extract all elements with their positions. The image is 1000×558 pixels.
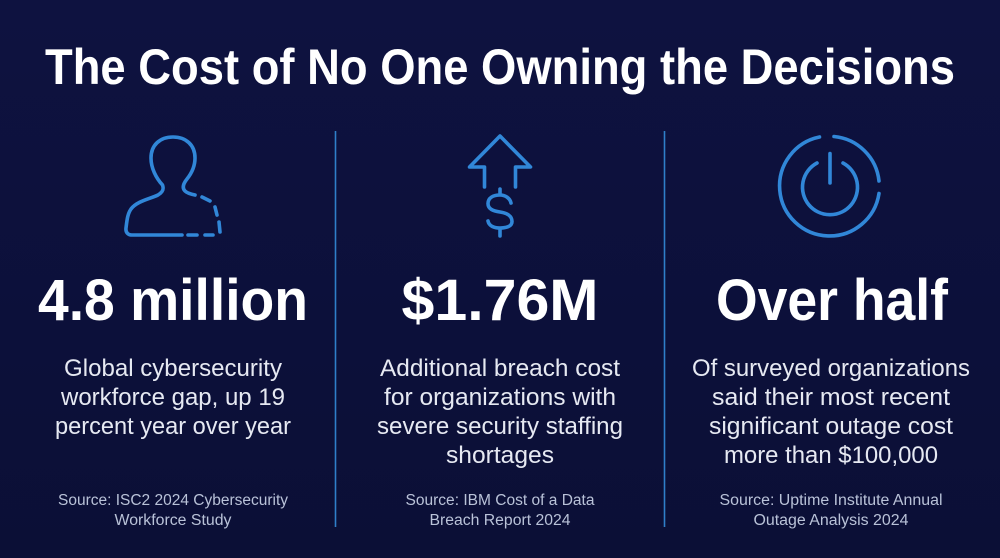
source: IBM: Source: IBM Cost of a Data	[406, 492, 595, 509]
source: ISC2	[58, 492, 288, 529]
stat: 4.8 million: 4.8 million	[38, 268, 308, 333]
source: IBM: Breach Report 2024	[430, 512, 571, 529]
text block: workforce description	[55, 355, 291, 440]
text block: breach description: severe security staffing	[377, 413, 623, 440]
text block: workforce description: workforce gap, up 19	[60, 384, 285, 411]
icon: up arrow with dollar sign	[470, 136, 530, 236]
text block: breach description: shortages	[446, 442, 554, 469]
text block: workforce description: percent year over year	[55, 413, 291, 440]
icon: person with dashed shoulder	[126, 137, 220, 235]
source: ISC2: Workforce Study	[114, 512, 232, 529]
text block: outage description: significant outage cost	[709, 413, 953, 440]
text block: outage description: more than $100,000	[724, 442, 938, 469]
source: Uptime: Outage Analysis 2024	[754, 512, 909, 529]
text block: breach description: for organizations with	[384, 384, 616, 411]
stat: $1.76M: $1.76M	[402, 268, 598, 333]
text block: breach description: Additional breach cost	[380, 355, 620, 382]
text block: outage description	[692, 355, 970, 469]
text block: breach description	[377, 355, 623, 469]
text block: outage description: said their most recent	[712, 384, 950, 411]
text block: outage description: Of surveyed organizations	[692, 355, 970, 382]
text block: workforce description: Global cybersecurity	[64, 355, 282, 382]
panel: workforce gap	[38, 137, 308, 529]
source: Uptime	[720, 492, 942, 529]
source: IBM	[406, 492, 595, 529]
panel: breach cost	[377, 136, 623, 529]
panel: outage cost	[692, 136, 970, 529]
source: Uptime: Source: Uptime Institute Annual	[720, 492, 942, 509]
source: ISC2: Source: ISC2 2024 Cybersecurity	[58, 492, 288, 509]
icon: power button	[780, 136, 879, 236]
stat: Over half: Over half	[716, 268, 949, 333]
